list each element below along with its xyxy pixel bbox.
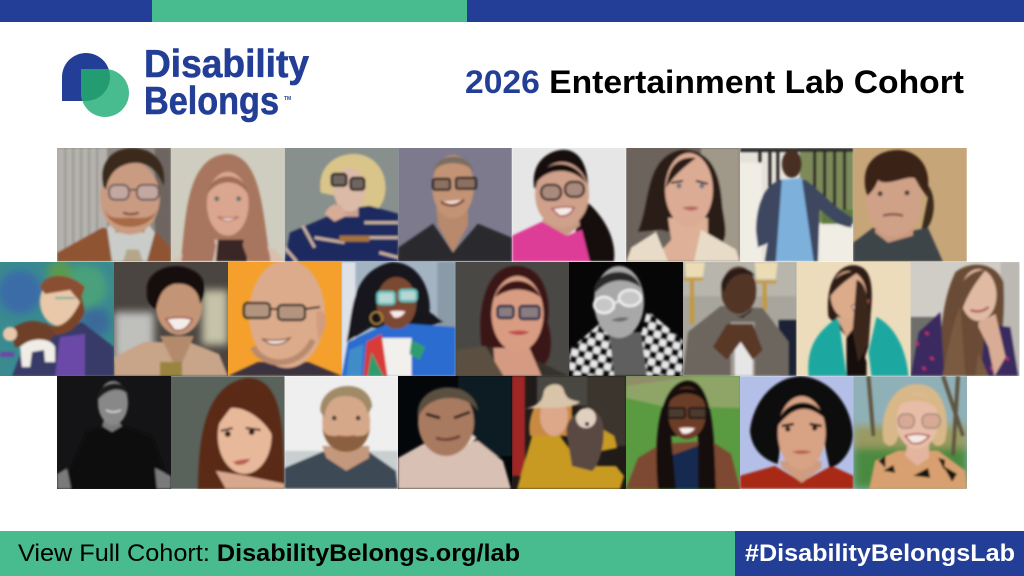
portrait row 1 xyxy=(57,148,967,262)
portrait: woman with long brown hair, hand under chin xyxy=(910,262,1020,376)
portrait row 3 xyxy=(57,376,967,489)
portrait: woman with dark wavy hair and cream blazer xyxy=(626,148,740,262)
portrait: bearded man in grey tee xyxy=(284,376,398,489)
logo: Disability Belongs xyxy=(62,43,309,123)
footer hashtag: #DisabilityBelongsLab xyxy=(745,540,1015,567)
portrait row 2 xyxy=(0,260,1020,376)
portrait: bald man with glasses and dark sweater xyxy=(398,148,512,262)
footer call to action xyxy=(0,531,735,576)
footer bar xyxy=(0,531,1024,576)
portrait: man in white tee on dark background xyxy=(398,376,512,489)
logo wordmark: TM xyxy=(284,96,291,102)
portrait: woman with pink top and dark ponytail xyxy=(512,148,626,262)
portrait: woman with long auburn hair on grey xyxy=(171,376,284,489)
footer call to action: View Full Cohort: DisabilityBelongs.org/lab xyxy=(18,540,520,567)
portrait: man in blue shirt and blazer outdoors xyxy=(740,148,854,262)
portrait: woman with locs and teal glasses xyxy=(342,262,456,376)
logo wordmark: Belongs xyxy=(144,80,279,123)
portrait: woman in hat with dog xyxy=(512,376,626,489)
portrait: woman in teal jacket xyxy=(796,262,910,376)
portrait: woman with braids in park xyxy=(626,376,740,489)
icon: overlapping arch and circle xyxy=(62,53,129,117)
footer hashtag xyxy=(735,531,1024,576)
portrait: person with curly black hair and red shirt xyxy=(740,376,854,489)
logo wordmark xyxy=(144,43,309,123)
portrait: cartoon avatar with cat xyxy=(0,262,114,376)
portrait: woman with blond bob and cat sweater in park xyxy=(854,376,967,489)
portrait: young man with dark hair on tan wall xyxy=(853,148,967,262)
portrait: smiling woman in tan blazer xyxy=(114,262,228,376)
portrait: black and white checkered jacket xyxy=(569,262,683,376)
portrait: woman with burgundy hair and blue glasses xyxy=(456,262,569,376)
portrait: blond person with striped sweater xyxy=(284,148,398,262)
portrait: bald man with glasses on orange xyxy=(228,262,342,376)
portrait grid xyxy=(0,148,1020,489)
top colour bar xyxy=(0,0,1024,22)
portrait: black and white young man in dark tee xyxy=(57,376,171,489)
logo wordmark: Disability xyxy=(144,43,309,86)
portrait: man with glasses and brown blazer xyxy=(57,148,171,262)
title: 2026 Entertainment Lab Cohort xyxy=(465,64,964,100)
portrait: woman with long auburn hair xyxy=(171,148,284,262)
portrait: man in grey blazer with hands clasped xyxy=(683,262,796,376)
